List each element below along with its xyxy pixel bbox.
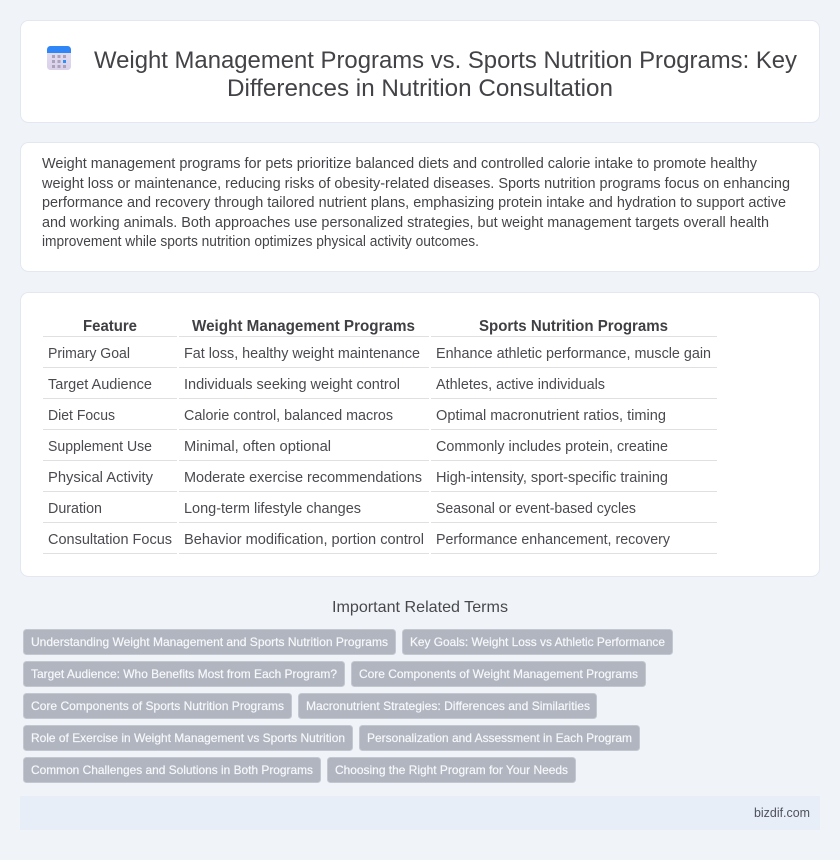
- row: physical activity: [48, 470, 668, 486]
- panel: summary paragraph: performance and recovery through tailored nutrient plans, emphasizing protein intake and hydration to support active: [42, 195, 786, 211]
- row: diet focus: Diet Focus: [48, 408, 115, 424]
- footer bar: bizdif.com: [754, 806, 810, 820]
- row: supplement use: Minimal, often optional: [184, 439, 331, 455]
- tag list: related terms: Personalization and Assessment in Each Program: [367, 731, 632, 745]
- row: duration: Duration: [48, 501, 102, 517]
- row: supplement use: [48, 439, 668, 455]
- tag list: related terms: Macronutrient Strategies: Differences and Similarities: [306, 699, 590, 713]
- tag list: related terms: [24, 630, 672, 782]
- row: diet focus: Optimal macronutrient ratios, timing: [436, 408, 666, 424]
- panel: comparison table: [20, 292, 820, 576]
- tag list: related terms: Role of Exercise in Weight Management vs Sports Nutrition: [31, 731, 345, 745]
- panel: summary paragraph: weight loss or maintenance, reducing risks of obesity-related diseases. Sports nutrition programs focus on enhancing: [41, 176, 790, 192]
- icon: calendar: [47, 46, 71, 70]
- row: supplement use: Commonly includes protein, creatine: [436, 439, 668, 455]
- title: [94, 47, 797, 102]
- panel: summary paragraph: Weight management programs for pets prioritize balanced diets and controlled calorie intake to promote healthy: [42, 156, 758, 172]
- title: Weight Management Programs vs. Sports Nutrition Programs: Key: [94, 47, 797, 74]
- row: target audience: [48, 377, 605, 393]
- row: primary goal: Fat loss, healthy weight maintenance: [184, 346, 420, 362]
- row: target audience: Individuals seeking weight control: [184, 377, 400, 393]
- row: consultation focus: Behavior modification, portion control: [184, 532, 424, 548]
- row: consultation focus: Consultation Focus: [48, 532, 172, 548]
- row: consultation focus: Performance enhancement, recovery: [436, 532, 671, 548]
- row: duration: [48, 501, 636, 517]
- row: target audience: Target Audience: [48, 377, 152, 393]
- row: physical activity: Physical Activity: [48, 470, 154, 486]
- tag list: related terms: Understanding Weight Management and Sports Nutrition Programs: [31, 635, 388, 649]
- panel: title header: [20, 20, 820, 122]
- panel: summary paragraph: improvement while sports nutrition optimizes physical activity outcomes.: [42, 234, 479, 250]
- tag list: related terms: Core Components of Sports Nutrition Programs: [31, 699, 284, 713]
- panel: summary paragraph: [20, 142, 820, 272]
- row: physical activity: High-intensity, sport-specific training: [436, 470, 668, 486]
- row: primary goal: Primary Goal: [48, 346, 130, 362]
- footer bar: [20, 796, 820, 830]
- table header: [83, 318, 668, 335]
- row: diet focus: Calorie control, balanced macros: [184, 408, 393, 424]
- title: Differences in Nutrition Consultation: [227, 75, 613, 102]
- tag list: related terms: Key Goals: Weight Loss vs Athletic Performance: [410, 635, 665, 649]
- row: physical activity: Moderate exercise recommendations: [184, 470, 422, 486]
- tag list: related terms: Core Components of Weight Management Programs: [359, 667, 638, 681]
- panel: summary paragraph: and working animals. Both approaches use personalized strategies, but weight management targets overall health: [42, 215, 769, 231]
- table header: Feature: [83, 318, 137, 335]
- tag list: related terms: Common Challenges and Solutions in Both Programs: [31, 763, 313, 777]
- row: target audience: Athletes, active individuals: [436, 377, 605, 393]
- table header: Weight Management Programs: [192, 318, 415, 335]
- row: primary goal: [48, 346, 711, 362]
- tag list: related terms: Choosing the Right Program for Your Needs: [335, 763, 568, 777]
- row: consultation focus: [48, 532, 671, 548]
- tag list: related terms: Target Audience: Who Benefits Most from Each Program?: [31, 667, 337, 681]
- table header: Sports Nutrition Programs: [479, 318, 668, 335]
- row: duration: Long-term lifestyle changes: [184, 501, 361, 517]
- row: supplement use: Supplement Use: [48, 439, 152, 455]
- row: diet focus: [48, 408, 666, 424]
- row: duration: Seasonal or event-based cycles: [436, 501, 636, 517]
- row: primary goal: Enhance athletic performance, muscle gain: [436, 346, 711, 362]
- heading: important related terms: Important Related Terms: [332, 599, 508, 616]
